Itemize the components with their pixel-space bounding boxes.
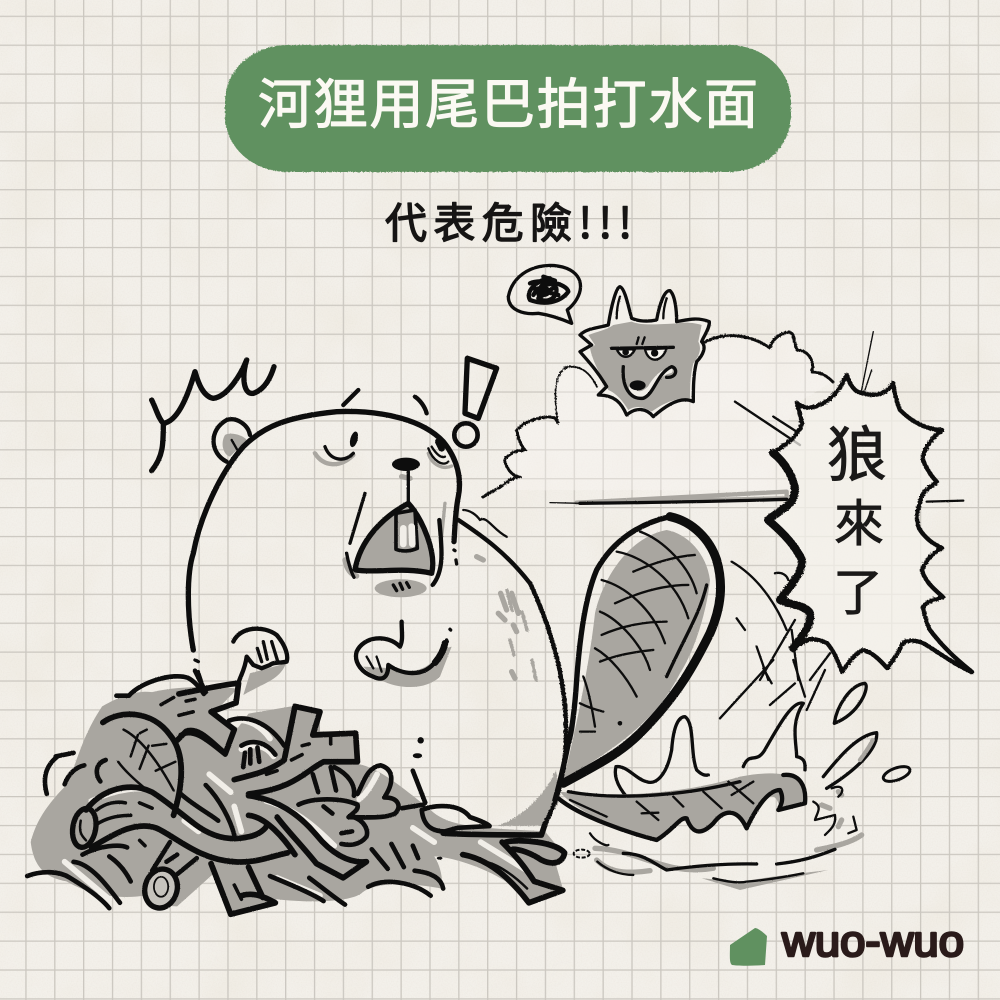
water splash spikes [615,703,805,810]
subtitle: 代表危險!!! [385,190,632,251]
lower left sticks [27,846,131,908]
alarm squiggle [152,360,274,471]
tail outline [577,517,670,680]
falling debris dots [413,737,442,860]
beaver nose [392,458,420,503]
motion lines [720,660,825,718]
large leaf [103,714,181,815]
logo house icon [730,928,767,966]
front leaves [299,765,399,845]
highlights [65,720,527,899]
beaver teeth [396,510,417,551]
burst shape [768,375,972,672]
crossing branch [249,796,366,878]
water ripples [574,787,862,890]
water droplets [823,683,912,788]
wolf head [580,287,709,417]
scribble in bubble [529,277,568,303]
torn fur line [463,510,507,537]
wolf [580,287,709,417]
action lines around burst [550,332,963,680]
left leaf lines [45,753,106,794]
logo: wuo-wuo [730,917,964,966]
shout burst: wolf is coming [768,375,972,672]
wolf face fill [588,322,702,412]
beaver ear [214,419,250,462]
exclamation mark [454,358,497,447]
burst text: 來 [834,484,884,556]
center branches [181,706,357,835]
beaver eyes [315,431,452,467]
splashing tail and water [558,660,912,890]
bark marks [270,844,443,905]
pile gray mass [31,687,563,915]
slapping tail [558,773,807,840]
main twisted branch [70,787,288,862]
burst text: 狼 [827,407,887,494]
back leaves [229,719,354,796]
title banner [225,45,791,172]
tail hatching [580,532,697,732]
dust cloud behind wolf [483,332,833,497]
outline breaks [195,550,457,682]
cut log end [140,842,197,912]
tail fill [563,530,710,780]
burst text: 了 [833,553,883,625]
beaver head and body outline [188,411,459,650]
wolf features [612,297,676,398]
beaver right paw [356,622,452,687]
beaver [152,358,530,695]
big beaver tail [555,517,721,800]
fur ticks [477,557,518,678]
top log [177,683,239,754]
logo wordmark: wuo-wuo [781,917,964,966]
beaver left paw [233,629,287,695]
head shock marks [343,390,427,413]
pile of branches and leaves [27,671,565,915]
right leaf and stick [402,771,565,903]
beaver lower body line [498,583,566,826]
wolf outline [580,287,709,417]
top mound [116,671,206,696]
beaver body shoulder line [458,520,530,583]
beaver mouth [345,493,445,597]
center log [211,864,275,914]
title text: 河狸用尾巴拍打水面 [258,60,758,139]
wolf thought bubble [508,265,581,323]
